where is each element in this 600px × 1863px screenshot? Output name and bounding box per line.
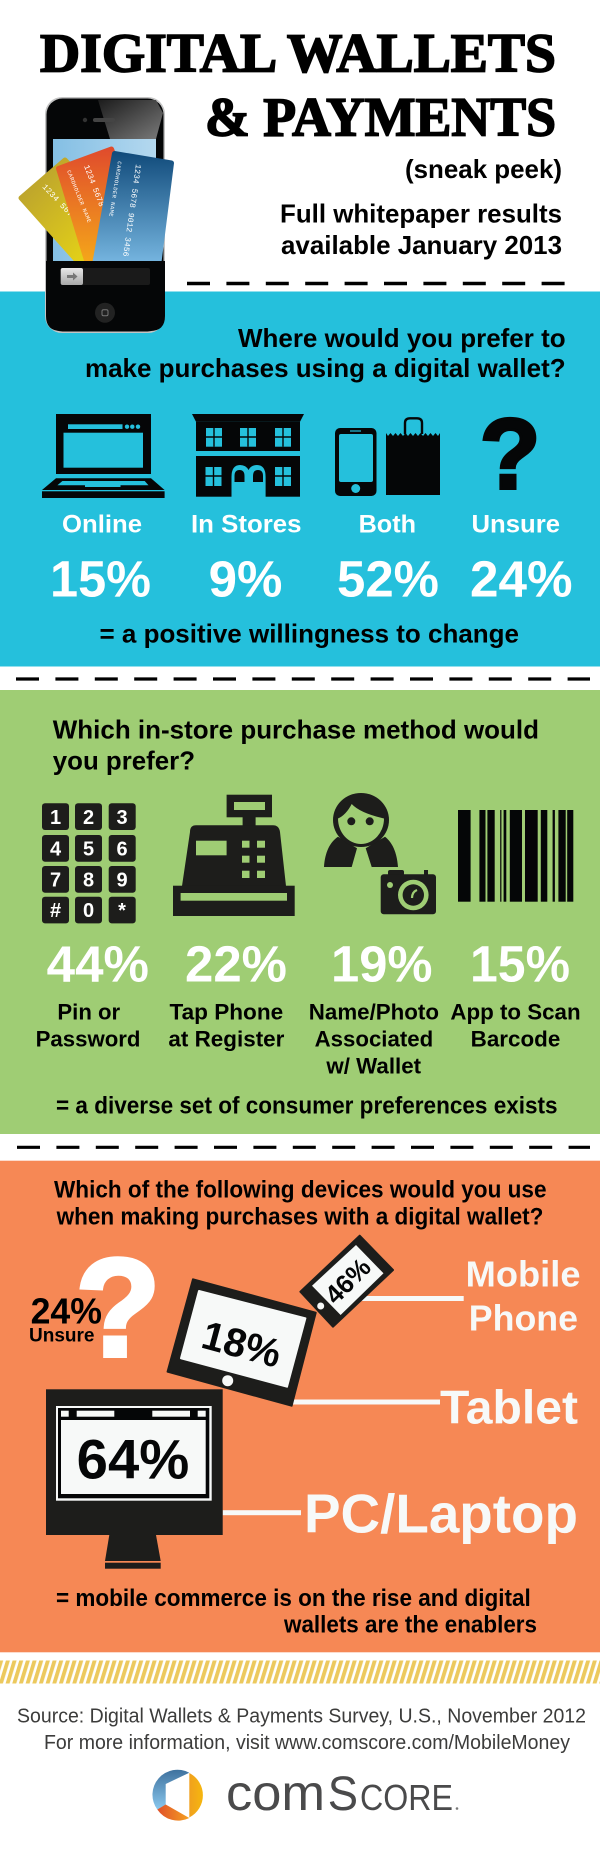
percentages: purchase methods: 19% [331, 936, 432, 993]
heading: in-store method: Which in-store purchase method would [53, 714, 539, 744]
icon: keypad: * [118, 900, 126, 922]
label row: purchase methods: Pin or [57, 999, 121, 1024]
heading: where to purchase: Where would you prefer to [238, 323, 566, 353]
connector lines [223, 1296, 464, 1515]
label row: purchase methods: Password [36, 1027, 140, 1052]
icon: phone with 46%: 46% [319, 1252, 377, 1310]
percentages: purchase methods: 22% [185, 936, 287, 993]
icon: phone and shopping bag [335, 418, 440, 496]
release note [280, 199, 562, 260]
icon: smartphone with credit cards: 1234 5678 [40, 183, 78, 223]
label row: purchase methods: at Register [168, 1027, 285, 1052]
icon: keypad: 4 [50, 838, 62, 860]
logo: comScore: com [226, 1765, 325, 1821]
icon: smartphone with credit cards: CARDHOLDER NAME [65, 169, 93, 224]
icon: keypad: 8 [83, 870, 94, 892]
release note: available January 2013 [281, 230, 562, 260]
source text: Source: Digital Wallets & Payments Survey, U.S., November 2012 [17, 1706, 586, 1728]
panel: where to purchase [0, 292, 600, 666]
icon: store building [192, 414, 304, 497]
icon: tablet with 18% [168, 1279, 316, 1406]
stat: unsure: Unsure [29, 1326, 94, 1347]
percentages: purchase locations: 15% [50, 551, 151, 608]
icon: keypad: 0 [83, 900, 94, 922]
panel: devices [0, 1161, 600, 1652]
label row: purchase methods: Barcode [471, 1027, 560, 1052]
icon: tablet with 18%: 18% [197, 1313, 286, 1377]
device labels: Tablet [440, 1380, 578, 1433]
label row: purchase methods: w/ Wallet [325, 1053, 422, 1078]
heading: in-store method [53, 714, 539, 775]
label row: purchase methods: Name/Photo [309, 999, 439, 1024]
panel: in-store purchase method [0, 690, 600, 1134]
label row: purchase methods: Tap Phone [170, 999, 283, 1024]
icon: keypad: 5 [83, 838, 94, 860]
label row: purchase locations: Unsure [472, 511, 560, 539]
icon: cash register [173, 795, 295, 916]
percentages: purchase locations: 52% [337, 551, 439, 608]
release note: Full whitepaper results [280, 199, 562, 229]
label row: purchase locations: In Stores [191, 511, 302, 539]
takeaway: diverse preferences: = a diverse set of consumer preferences exists [56, 1092, 558, 1119]
device labels: Mobile [466, 1254, 580, 1295]
icon: keypad: 3 [116, 807, 128, 829]
icon: keypad: 6 [116, 838, 128, 860]
icon: keypad: 1 [50, 807, 61, 829]
heading: devices: when making purchases with a digital wallet? [56, 1203, 543, 1230]
icon: laptop [42, 414, 165, 498]
source text: For more information, visit www.comscore.com/MobileMoney [44, 1732, 570, 1754]
label row: purchase locations: Online [62, 511, 142, 539]
percentages: purchase locations: 9% [209, 551, 282, 608]
subtitle: (sneak peek) [405, 154, 562, 184]
logo: comScore: S [328, 1768, 358, 1821]
device labels [304, 1254, 580, 1545]
device labels: PC/Laptop [304, 1483, 578, 1545]
device labels: Phone [469, 1298, 578, 1339]
takeaway: mobile commerce: = mobile commerce is on the rise and digital [56, 1585, 531, 1612]
heading: where to purchase: make purchases using a digital wallet? [85, 353, 566, 383]
label row: purchase locations [62, 511, 560, 539]
label row: purchase methods: Associated [315, 1027, 433, 1052]
icon: smartphone with credit cards: 1234 5678 [81, 164, 105, 208]
title [40, 22, 556, 147]
source text [17, 1706, 586, 1754]
percentages: purchase methods [47, 936, 570, 993]
percentages: purchase methods: 44% [47, 936, 149, 993]
title: & PAYMENTS [205, 86, 556, 147]
icon: monitor with 64%: 64% [77, 1427, 189, 1490]
stat: unsure: 24% [31, 1290, 102, 1331]
heading: in-store method: you prefer? [53, 745, 195, 775]
icon: smartphone with credit cards: 1234 5678 9012 3456 [120, 164, 142, 257]
heading: devices [54, 1176, 546, 1230]
takeaway: mobile commerce [56, 1585, 537, 1639]
takeaway: mobile commerce: wallets are the enablers [283, 1612, 537, 1639]
icon: white question mark: ? [75, 1229, 161, 1386]
icon: keypad: 9 [116, 870, 128, 892]
icon: keypad: 2 [83, 807, 94, 829]
percentages: purchase locations [50, 551, 572, 608]
icon: keypad: 7 [50, 870, 61, 892]
label row: purchase methods [36, 999, 581, 1078]
icon: smartphone with credit cards: CARDHOLDER NAME [107, 161, 123, 218]
icon: keypad: # [50, 900, 61, 922]
icon: barcode [458, 810, 573, 902]
icon: phone with 46% [300, 1236, 393, 1327]
percentages: purchase locations: 24% [470, 551, 572, 608]
logo: comScore [152, 1765, 458, 1821]
icon: question mark: ? [479, 398, 541, 510]
icon: person with camera [324, 793, 436, 914]
heading: where to purchase [85, 323, 566, 383]
icon: keypad [42, 803, 136, 923]
icon: smartphone with credit cards [21, 97, 172, 333]
takeaway: willingness to change: = a positive willingness to change [100, 619, 519, 649]
logo: comScore: CORE [360, 1777, 453, 1818]
heading: devices: Which of the following devices would you use [54, 1176, 546, 1203]
label row: purchase locations: Both [359, 511, 416, 539]
percentages: purchase methods: 15% [470, 936, 570, 993]
label row: purchase methods: App to Scan [450, 999, 581, 1024]
icon: monitor with 64% [46, 1389, 223, 1569]
title: DIGITAL WALLETS [40, 22, 556, 83]
